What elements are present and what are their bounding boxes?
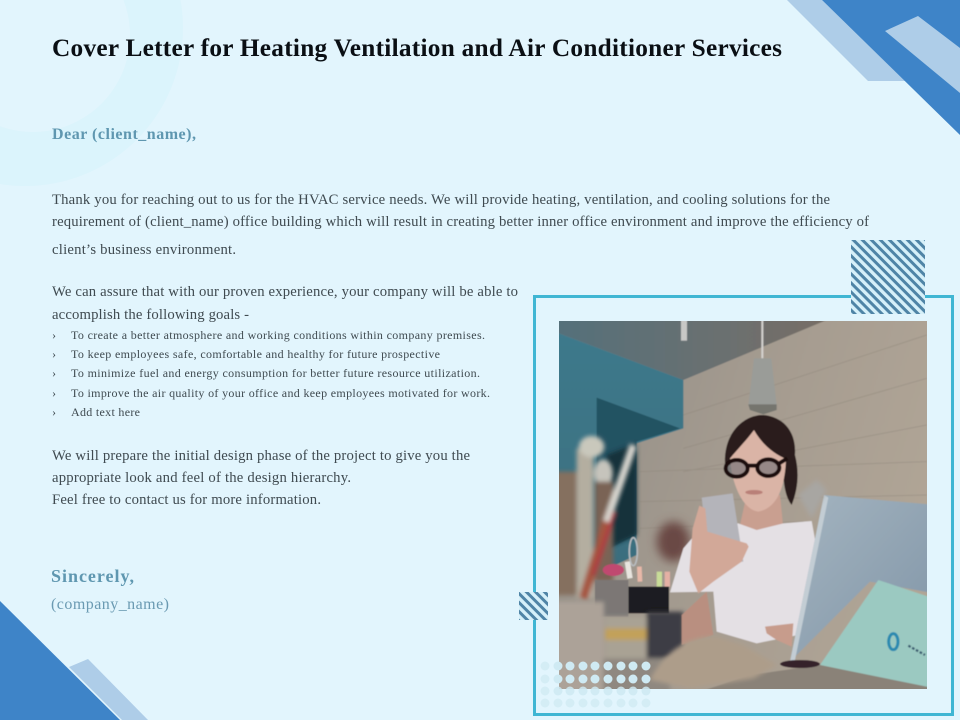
keyboard shadow xyxy=(780,660,820,668)
goals list: › xyxy=(52,405,56,419)
wall plank lines xyxy=(856,335,926,497)
notebook logo xyxy=(889,634,925,655)
goals list: To improve the air quality of your office and keep employees motivated for work. xyxy=(71,386,490,400)
table foreground xyxy=(708,664,927,689)
hair back xyxy=(725,415,798,505)
striped square small xyxy=(519,592,548,620)
intro paragraph: requirement of (client_name) office building which will result in creating better inner office environment and improve the efficiency of xyxy=(52,214,869,230)
corner shapes bottom left xyxy=(0,601,148,720)
intro paragraph: Thank you for reaching out to us for the HVAC service needs. We will provide heating, ventilation, and cooling solutions for the xyxy=(52,192,830,208)
wall xyxy=(559,321,927,689)
assurance paragraph: accomplish the following goals - xyxy=(52,307,249,323)
intro paragraph xyxy=(52,192,869,258)
goals list: To create a better atmosphere and working conditions within company premises. xyxy=(71,328,485,342)
teal wall xyxy=(559,332,684,565)
goals list: › xyxy=(52,328,56,342)
woman xyxy=(670,415,817,647)
ceiling xyxy=(559,321,825,380)
title: Cover Letter for Heating Ventilation and Air Conditioner Services xyxy=(52,34,782,62)
phone xyxy=(702,493,743,563)
sign-off: Sincerely, xyxy=(51,566,134,586)
closing paragraph xyxy=(52,448,470,508)
right arm xyxy=(682,592,713,645)
lamp xyxy=(748,320,777,414)
blurred object on table xyxy=(650,642,764,685)
company name: (company_name) xyxy=(51,596,169,613)
closing paragraph: We will prepare the initial design phase of the project to give you the xyxy=(52,448,470,464)
photo frame xyxy=(534,296,952,714)
jar and table items xyxy=(559,600,685,689)
closing paragraph: Feel free to contact us for more information. xyxy=(52,492,321,508)
closing paragraph: appropriate look and feel of the design hierarchy. xyxy=(52,470,351,486)
ceiling rail xyxy=(681,320,687,341)
background clutter xyxy=(657,522,690,562)
corner shapes top right xyxy=(787,0,960,135)
intro paragraph: client’s business environment. xyxy=(52,242,236,258)
brushes blurred left xyxy=(559,433,638,600)
hand xyxy=(689,506,749,593)
dot grid xyxy=(540,662,650,708)
pens and cup xyxy=(595,538,669,617)
goals list: To keep employees safe, comfortable and healthy for future prospective xyxy=(71,347,440,361)
shirt xyxy=(670,521,817,643)
dark alcove xyxy=(597,398,680,555)
photo: woman with phone and laptop xyxy=(559,321,927,689)
salutation: Dear (client_name), xyxy=(52,126,196,143)
glasses xyxy=(726,458,787,477)
assurance paragraph: We can assure that with our proven experience, your company will be able to xyxy=(52,284,518,300)
lips xyxy=(745,490,763,495)
notebook xyxy=(820,580,927,687)
goals list: › xyxy=(52,366,56,380)
goals list: › xyxy=(52,347,56,361)
goals list: Add text here xyxy=(71,405,140,419)
goals list: To minimize fuel and energy consumption for better future resource utilization. xyxy=(71,366,480,380)
neck xyxy=(740,495,783,532)
face xyxy=(730,430,786,512)
hand on laptop xyxy=(765,623,793,647)
chair detail xyxy=(799,482,826,516)
goals list xyxy=(52,328,490,419)
assurance paragraph xyxy=(52,284,518,323)
goals list: › xyxy=(52,386,56,400)
striped square top xyxy=(851,240,925,314)
laptop xyxy=(796,494,927,655)
decorative ring top left xyxy=(0,0,183,186)
